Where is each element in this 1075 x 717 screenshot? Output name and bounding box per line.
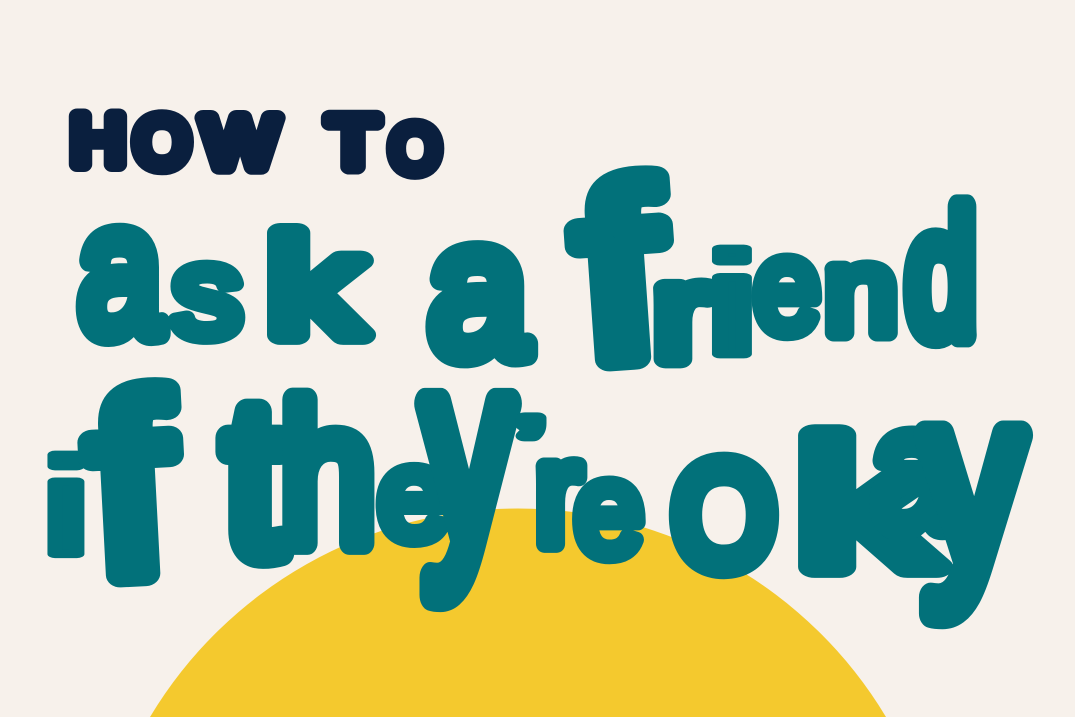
heading: they're <box>225 306 644 601</box>
heading: okay <box>673 343 1022 616</box>
heading: friend: n <box>825 223 897 359</box>
heading: if: f <box>83 343 179 630</box>
heading: friend: e <box>754 211 820 360</box>
heading: HOW TO: T <box>328 104 378 183</box>
heading: if: i <box>38 430 94 583</box>
heading: HOW TO <box>71 101 440 186</box>
title <box>38 101 1022 630</box>
heading: okay: O <box>673 433 775 598</box>
heading: friend <box>568 133 976 414</box>
heading: they're: y <box>424 306 512 598</box>
heading: a: a <box>428 182 528 396</box>
heading: HOW TO: W <box>203 103 277 182</box>
heading: okay: a <box>872 373 953 566</box>
heading: friend: f <box>568 133 671 414</box>
heading: ask: s <box>172 221 242 364</box>
heading: HOW TO: H <box>71 101 125 179</box>
heading: friend: i <box>702 223 762 385</box>
heading: they're: t <box>225 355 283 601</box>
heading: they're: ’ <box>517 400 545 490</box>
yellow sun semicircle <box>150 508 886 717</box>
heading: they're: r <box>535 412 581 576</box>
heading: they're: h <box>281 365 375 586</box>
heading: ask: a <box>78 166 162 374</box>
heading: they're: e <box>378 423 450 567</box>
heading: they're: e <box>574 435 644 584</box>
heading: friend: d <box>906 175 976 373</box>
heading: friend: r <box>654 238 710 388</box>
heading: HOW TO: O <box>390 111 440 186</box>
heading: okay: y <box>924 343 1022 616</box>
heading: ask: k <box>267 209 363 365</box>
heading: okay: k <box>796 403 937 606</box>
heading: if <box>38 343 179 630</box>
heading: HOW TO: O <box>134 104 190 183</box>
heading: ask <box>78 166 363 374</box>
